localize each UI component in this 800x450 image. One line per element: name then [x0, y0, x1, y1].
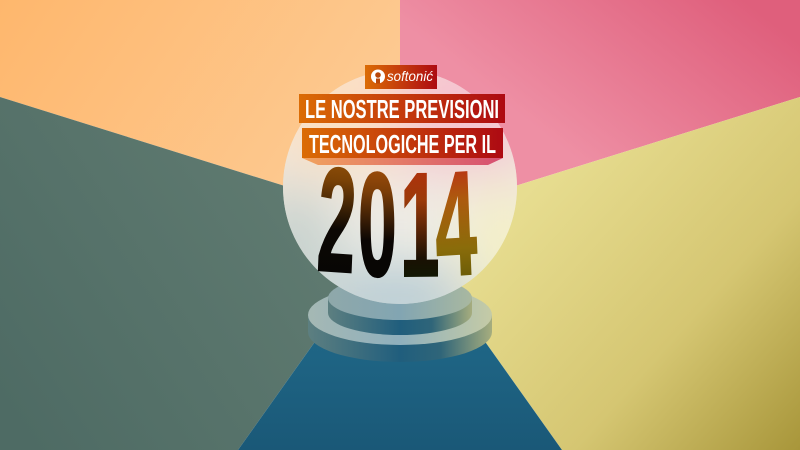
panel: orange background wedge: [0, 0, 400, 222]
panel: yellow background wedge: [400, 97, 800, 450]
banner: headline line one: [299, 94, 505, 124]
icon: softonic mascot: [371, 70, 385, 84]
icon: crystal ball: [283, 76, 517, 304]
banner: headline line two: [302, 128, 503, 165]
panel: blue background wedge: [238, 222, 562, 450]
panel: pink background wedge: [400, 0, 800, 222]
logo: softonic badge: [365, 65, 437, 89]
heading: year 2014: 2: [315, 138, 359, 305]
icon: crystal ball pedestal: [308, 276, 492, 362]
heading: year 2014: 4: [432, 140, 479, 308]
heading: year 2014: 1: [400, 142, 440, 308]
text: headline line one: LE NOSTRE PREVISIONI: [305, 94, 499, 124]
heading: year 2014: 0: [358, 141, 397, 308]
panel: green background wedge: [0, 97, 400, 450]
text: softonic wordmark: softonić: [387, 68, 433, 84]
heading: year 2014: [315, 138, 479, 308]
text: headline line two: TECNOLOGICHE PER IL: [309, 129, 496, 159]
